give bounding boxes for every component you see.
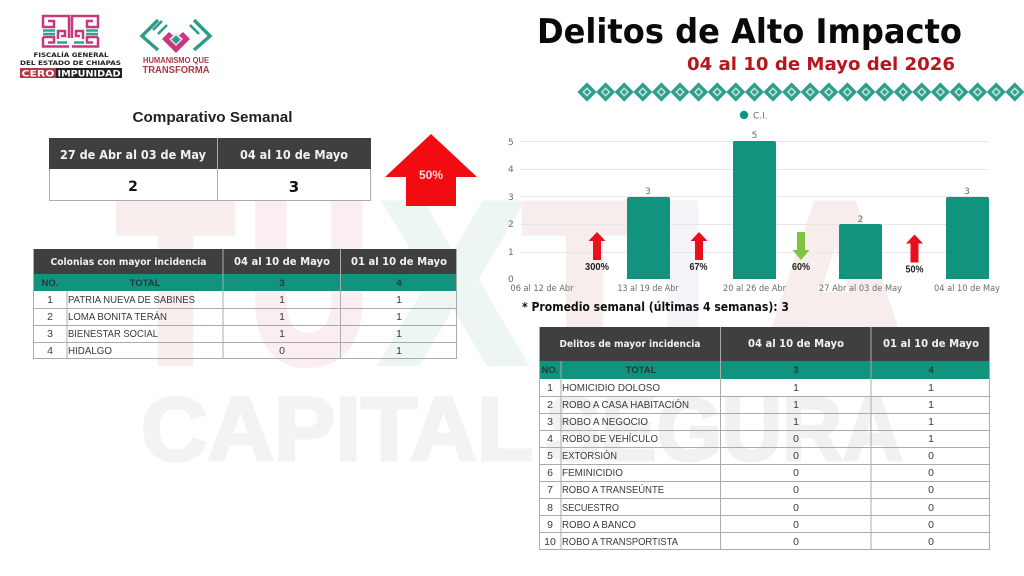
watermark: TUXTLA CAPITAL SEGURA: A [760,156,910,409]
table: delitos de mayor incidencia: ROBO A TRANSPORTISTA [562,536,678,548]
table: delitos de mayor incidencia: ROBO A NEGOCIO [562,416,648,428]
table: delitos de mayor incidencia: TOTAL [626,365,657,376]
arrow: 50% increase: 50% [419,168,443,182]
table: delitos de mayor incidencia: 3 [547,416,553,428]
arrow: 300% up [585,232,609,273]
table: delitos de mayor incidencia [539,327,990,550]
watermark: TUXTLA CAPITAL SEGURA: L [660,156,760,409]
title: Delitos de Alto Impacto [537,12,962,52]
table: colonias con mayor incidencia: 1 [279,311,285,323]
table: comparativo semanal: 27 de Abr al 03 de May [60,147,206,162]
x axis labels [510,284,1001,294]
arrow: 300% up: 300% [585,262,609,273]
table: delitos de mayor incidencia: 10 [544,536,556,548]
chart: C.I. por semana [508,111,1001,294]
bar value labels [645,131,970,225]
table: colonias con mayor incidencia: 01 al 10 de Mayo [351,255,447,268]
table: comparativo semanal: 04 al 10 de Mayo [240,147,348,162]
table: delitos de mayor incidencia: 2 [547,399,553,411]
icon: Fiscalía glyph [43,16,98,46]
table: colonias con mayor incidencia: PATRIA NUEVA DE SABINES [68,294,195,306]
table: colonias con mayor incidencia: TOTAL [130,278,161,289]
bar value labels: 3 [645,187,651,197]
logo: Fiscalía General: DEL ESTADO DE CHIAPAS [20,59,121,67]
table: delitos de mayor incidencia: 1 [928,382,934,394]
table: delitos de mayor incidencia: 0 [793,502,799,514]
y axis labels: 4 [508,165,514,175]
table: delitos de mayor incidencia: 01 al 10 de Mayo [883,337,979,350]
arrow: 60% down: 60% [792,262,810,273]
subtitle: date range: 04 al 10 de Mayo del 2026 [687,54,955,75]
table: delitos de mayor incidencia: 0 [928,450,934,462]
table: delitos de mayor incidencia: 0 [793,450,799,462]
table: colonias con mayor incidencia: LOMA BONITA TERÁN [68,310,167,323]
legend [740,111,768,122]
arrow: 67% up: 67% [690,262,708,273]
watermark: TUXTLA CAPITAL SEGURA: CAPITAL [141,380,533,480]
table: delitos de mayor incidencia: 0 [928,536,934,548]
watermark: TUXTLA CAPITAL SEGURA: X [383,156,523,409]
logo: Humanismo que Transforma [142,20,210,76]
note: promedio semanal: * Promedio semanal (últimas 4 semanas): 3 [522,300,789,314]
table: delitos de mayor incidencia: FEMINICIDIO [562,467,623,479]
y axis labels: 5 [508,138,514,148]
table: delitos de mayor incidencia: 1 [793,416,799,428]
y axis labels: 2 [508,220,514,230]
arrow: 60% down [792,232,810,273]
icon: hands and heart [142,20,210,53]
watermark: TUXTLA CAPITAL SEGURA [118,156,910,480]
legend: C.I. [753,112,768,122]
table: comparativo semanal [49,138,371,201]
heading: Comparativo Semanal: Comparativo Semanal [132,110,292,126]
table: delitos de mayor incidencia: HOMICIDIO DOLOSO [562,382,660,394]
table: delitos de mayor incidencia: NO. [542,365,558,376]
table: comparativo semanal: 2 [128,179,138,195]
table: delitos de mayor incidencia: 0 [793,536,799,548]
table: colonias con mayor incidencia: 3 [47,328,53,340]
arrow: 50% increase [385,134,477,206]
table: delitos de mayor incidencia: 1 [793,382,799,394]
table: colonias con mayor incidencia: 04 al 10 de Mayo [234,255,330,268]
table: colonias con mayor incidencia: 1 [396,345,402,357]
table: delitos de mayor incidencia: 0 [928,519,934,531]
table: delitos de mayor incidencia: 0 [928,467,934,479]
table: delitos de mayor incidencia: SECUESTRO [562,502,619,514]
table: colonias con mayor incidencia: 0 [279,345,285,357]
table: colonias con mayor incidencia: 4 [396,278,402,289]
table: delitos de mayor incidencia: 0 [928,484,934,496]
watermark: TUXTLA CAPITAL SEGURA: U [249,156,369,409]
table: colonias con mayor incidencia: NO. [42,278,58,289]
table: delitos de mayor incidencia: 0 [793,484,799,496]
table: comparativo semanal: 3 [289,178,299,196]
y axis labels: 3 [508,193,514,203]
table: delitos de mayor incidencia: ROBO A TRANSEÚNTE [562,483,664,496]
table: delitos de mayor incidencia: ROBO A BANCO [562,519,636,531]
table: delitos de mayor incidencia: 8 [547,502,553,514]
table: delitos de mayor incidencia: 9 [547,519,553,531]
table: colonias con mayor incidencia: BIENESTAR SOCIAL [68,328,158,340]
table: colonias con mayor incidencia: 1 [279,294,285,306]
x axis labels: 27 Abr al 03 de May [819,284,903,294]
x axis labels: 06 al 12 de Abr [510,284,574,294]
watermark: TUXTLA CAPITAL SEGURA: SEGURA [545,380,903,480]
y axis labels: 1 [508,248,514,258]
table: colonias con mayor incidencia: HIDALGO [68,345,112,357]
text: Fiscalía General del Estado de Chiapas: FISCALÍA GENERAL [34,50,108,59]
table: colonias con mayor incidencia: 2 [47,311,53,323]
table: delitos de mayor incidencia: ROBO DE VEHÍCULO [562,432,658,445]
text: Transforma: TRANSFORMA [142,65,210,76]
table: colonias con mayor incidencia: 4 [47,345,53,357]
bar value labels: 3 [964,187,970,197]
table: delitos de mayor incidencia: 6 [547,467,553,479]
bar value labels: 5 [752,131,757,141]
table: colonias con mayor incidencia: 1 [47,294,53,306]
table: delitos de mayor incidencia: 0 [793,433,799,445]
arrow: 50% up: 50% [906,264,924,276]
table: delitos de mayor incidencia: ROBO A CASA HABITACIÓN [562,398,689,411]
table: colonias con mayor incidencia: 1 [396,328,402,340]
badge: Cero Impunidad: CERO [22,70,54,80]
arrow: 67% up [690,232,708,273]
table: delitos de mayor incidencia: Delitos de mayor incidencia [560,339,700,350]
watermark: TUXTLA CAPITAL SEGURA: T [524,156,645,409]
watermark: TUXTLA CAPITAL SEGURA: T [118,156,233,409]
table: delitos de mayor incidencia: 1 [928,416,934,428]
table: delitos de mayor incidencia: 5 [547,450,553,462]
x axis labels: 20 al 26 de Abr [723,284,786,294]
text: Humanismo que: HUMANISMO QUE [143,56,209,65]
table: colonias con mayor incidencia: Colonias con mayor incidencia [50,257,206,268]
logo: Fiscalía General [20,16,122,80]
bar value labels: 2 [858,215,863,225]
decorative band of diamonds [577,82,1024,102]
badge: Cero Impunidad: IMPUNIDAD [58,70,120,80]
table: delitos de mayor incidencia: 0 [793,519,799,531]
table: delitos de mayor incidencia: 1 [547,382,553,394]
table: colonias con mayor incidencia [33,249,457,359]
bars [627,141,989,279]
badge: Cero Impunidad [20,68,122,80]
table: colonias con mayor incidencia: 1 [396,294,402,306]
table: colonias con mayor incidencia: 1 [396,311,402,323]
table: delitos de mayor incidencia: 0 [793,467,799,479]
table: delitos de mayor incidencia: 3 [793,365,799,376]
table: colonias con mayor incidencia: 3 [279,278,285,289]
table: delitos de mayor incidencia: 1 [928,399,934,411]
table: delitos de mayor incidencia: 7 [547,484,553,496]
table: delitos de mayor incidencia: EXTORSIÓN [562,449,617,462]
table: delitos de mayor incidencia: 4 [928,365,934,376]
table: delitos de mayor incidencia: 1 [928,433,934,445]
x axis labels: 13 al 19 de Abr [618,284,679,294]
table: colonias con mayor incidencia: 1 [279,328,285,340]
table: delitos de mayor incidencia: 1 [793,399,799,411]
x axis labels: 04 al 10 de May [934,284,1001,294]
table: delitos de mayor incidencia: 04 al 10 de Mayo [748,337,844,350]
y axis labels [508,138,514,285]
arrow: 50% up [906,234,924,276]
table: delitos de mayor incidencia: 4 [547,433,553,445]
y axis labels: 0 [508,275,514,285]
table: delitos de mayor incidencia: 0 [928,502,934,514]
